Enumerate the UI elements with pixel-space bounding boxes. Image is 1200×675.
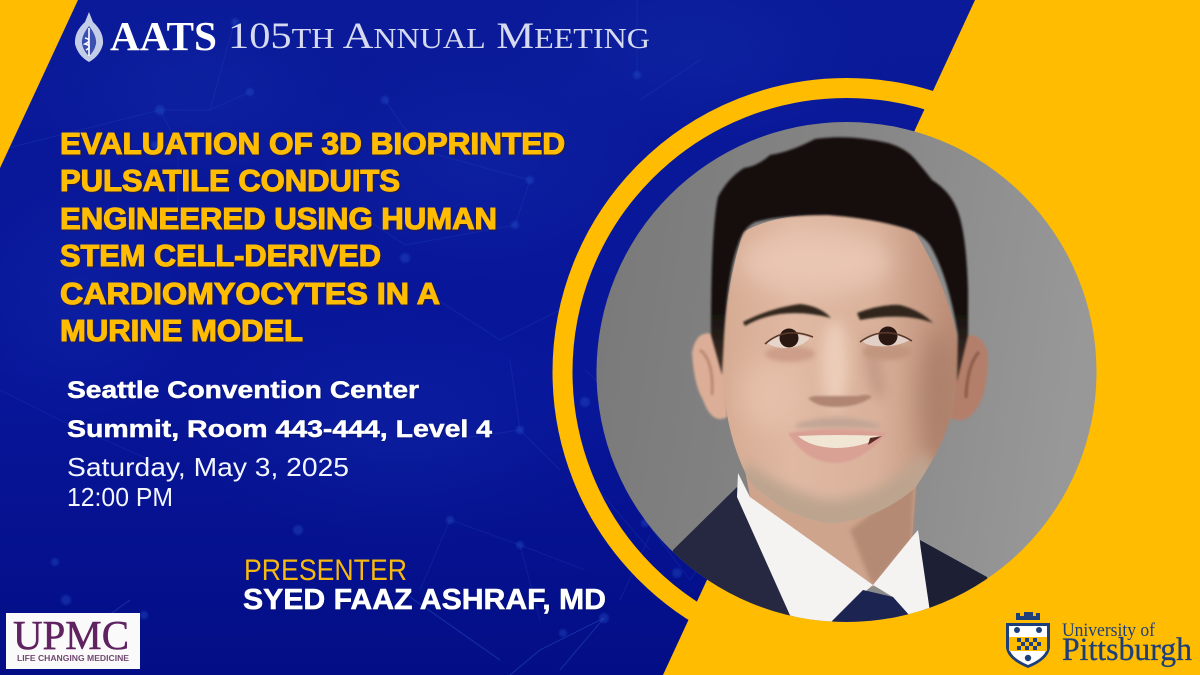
yellow ring around portrait	[562, 88, 1130, 656]
title: PULSATILE CONDUITS	[60, 164, 400, 198]
icon: Pitt shield	[1006, 612, 1050, 668]
eyes	[765, 326, 912, 348]
UPMC logo	[6, 612, 140, 669]
title: CARDIOMYOCYTES IN A	[60, 277, 440, 311]
date and time	[67, 452, 349, 512]
face shading	[735, 232, 960, 535]
photo backdrop	[590, 115, 1105, 630]
UPMC logo: LIFE CHANGING MEDICINE	[17, 654, 130, 663]
presenter label: PRESENTER	[244, 554, 407, 587]
title: STEM CELL-DERIVED	[60, 239, 381, 273]
University of Pittsburgh logo	[1006, 612, 1192, 668]
tie	[832, 590, 908, 622]
meeting name: 105 TH ANNUAL MEETING	[228, 16, 650, 57]
presenter name: SYED FAAZ ASHRAF, MD	[243, 584, 606, 616]
portrait photo	[590, 115, 1105, 630]
shirt collar	[737, 473, 930, 625]
AATS wordmark: AATS	[110, 13, 217, 59]
venue: Summit, Room 443-444, Level 4	[67, 416, 493, 443]
University of Pittsburgh logo: Pittsburgh	[1062, 632, 1192, 668]
AATS meeting header	[75, 12, 650, 62]
title: MURINE MODEL	[60, 314, 303, 348]
date and time: 12:00 PM	[67, 482, 173, 512]
venue	[67, 377, 493, 443]
venue: Seattle Convention Center	[67, 377, 419, 404]
eyebrows	[743, 304, 933, 326]
title	[60, 127, 565, 348]
date and time: Saturday, May 3, 2025	[67, 452, 349, 482]
icon: AATS shield	[75, 12, 103, 62]
title: ENGINEERED USING HUMAN	[60, 202, 497, 236]
UPMC logo: UPMC	[13, 612, 129, 658]
face	[722, 214, 958, 524]
mouth	[788, 429, 887, 463]
Pitt wordmark: University of	[1062, 620, 1156, 641]
hair	[711, 137, 968, 382]
jacket	[672, 487, 988, 616]
neck	[745, 470, 917, 587]
title: EVALUATION OF 3D BIOPRINTED	[60, 127, 565, 161]
ears	[692, 333, 988, 420]
